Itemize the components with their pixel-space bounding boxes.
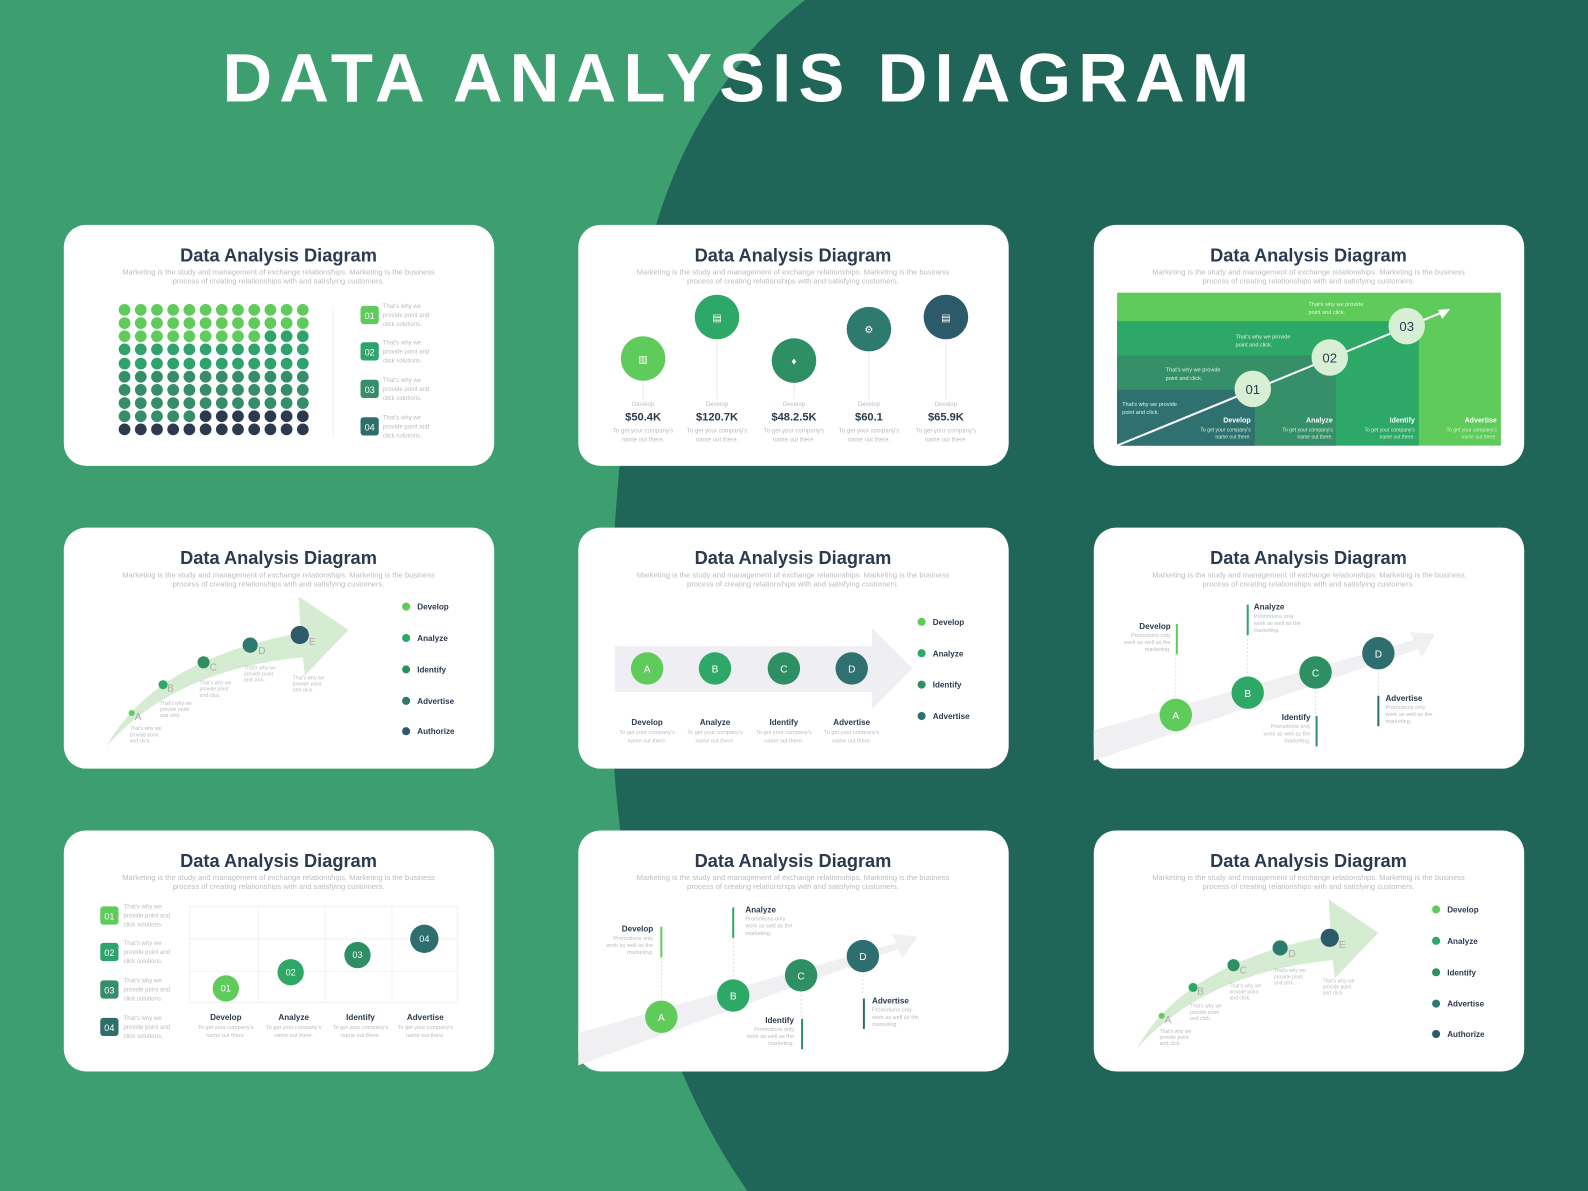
legend: Authorize — [417, 727, 455, 736]
panel: dot matrix: Data Analysis Diagram — [180, 245, 377, 265]
panel: dot matrix: process of creating relationships with and satisfying customers. — [173, 277, 384, 286]
scatter grid: Advertise — [407, 1013, 444, 1022]
legend list: 02 — [365, 347, 375, 357]
staircase chart: name out there. — [1215, 435, 1251, 441]
legend list: provide point and — [383, 313, 429, 319]
diagonal chart: Promotions only — [1271, 724, 1311, 730]
list: That's why we — [124, 978, 162, 984]
staircase chart: Advertise — [1465, 416, 1497, 424]
scatter grid: To get your company's — [266, 1025, 322, 1031]
diagonal chart: Promotions only — [613, 936, 653, 942]
list: click solutions. — [124, 959, 163, 965]
legend: Analyze — [417, 634, 448, 643]
staircase chart: point and click. — [1122, 410, 1159, 416]
scatter grid: To get your company's — [398, 1025, 453, 1031]
panel: diagonal milestones 2: Marketing is the study and management of exchange relationships. Marketing is the business — [637, 873, 949, 882]
list: 02 — [104, 948, 114, 958]
legend: Analyze — [933, 649, 964, 658]
legend list: 03 — [365, 385, 375, 395]
panel: diagonal milestones: Data Analysis Diagram — [1210, 548, 1407, 568]
curved arrow chart: provide point — [1323, 984, 1352, 990]
diagonal chart: Analyze — [745, 905, 776, 914]
panel: straight arrow: Data Analysis Diagram — [695, 548, 891, 568]
diagonal chart: C — [1312, 669, 1319, 680]
arrow with steps: name out there. — [832, 738, 872, 744]
staircase chart: name out there. — [1379, 435, 1415, 441]
legend: Develop — [1447, 905, 1479, 914]
panel: staircase — [1094, 225, 1524, 466]
staircase chart: To get your company's — [1447, 427, 1497, 433]
curved arrow chart: and click. — [1274, 980, 1295, 986]
panel: diagonal milestones: Marketing is the study and management of exchange relationships. Marketing is the business — [1152, 570, 1465, 579]
value circles: To get your company's — [764, 428, 824, 434]
staircase chart: 02 — [1322, 351, 1337, 366]
panel: circle values: process of creating relationships with and satisfying customers. — [687, 277, 899, 286]
panel: circle values — [578, 225, 1009, 466]
panel: curved arrow: Data Analysis Diagram — [180, 548, 377, 568]
panel: straight arrow: process of creating relationships with and satisfying customers. — [687, 579, 899, 588]
title: DATA ANALYSIS DIAGRAM — [222, 39, 1256, 116]
panel: dot matrix — [64, 225, 494, 466]
legend list: That's why we — [383, 378, 422, 384]
staircase chart — [1117, 293, 1501, 446]
panel: diagonal milestones 2 — [578, 830, 1009, 1071]
list: click solutions. — [124, 1034, 163, 1040]
diagonal chart — [578, 905, 919, 1065]
legend list: provide point and — [383, 349, 429, 355]
curved arrow chart: A — [1165, 1015, 1172, 1026]
legend list: provide point and — [383, 424, 429, 430]
diagonal chart: Identify — [1282, 713, 1311, 722]
curved arrow chart: E — [309, 637, 316, 648]
diagonal chart: marketing. — [1385, 719, 1412, 725]
curved arrow chart — [1136, 899, 1378, 1049]
diagonal chart: marketing. — [1285, 738, 1311, 744]
curved arrow chart: A — [135, 712, 142, 723]
list: 01 — [104, 912, 114, 922]
list: click solutions. — [124, 997, 163, 1003]
arrow with steps: D — [848, 664, 855, 675]
legend: Advertise — [1447, 1000, 1485, 1009]
diagonal chart: marketing. — [627, 950, 654, 956]
panel: staircase: Marketing is the study and management of exchange relationships. Marketing is the business — [1152, 267, 1465, 276]
scatter grid: name out there. — [206, 1033, 246, 1039]
value circles: Develop — [935, 402, 958, 408]
arrow with steps: name out there. — [764, 738, 804, 744]
scatter grid: Analyze — [278, 1013, 309, 1022]
arrow with steps: Analyze — [700, 718, 731, 727]
staircase chart: point and click. — [1236, 342, 1273, 348]
legend list — [361, 304, 429, 440]
curved arrow chart: provide point — [130, 732, 159, 738]
legend: Identify — [933, 681, 962, 690]
legend: Develop — [417, 603, 449, 612]
curved arrow chart: B — [167, 684, 174, 695]
staircase chart: name out there. — [1297, 435, 1333, 441]
curved arrow chart: C — [210, 662, 217, 673]
staircase chart: That's why we provide — [1122, 402, 1177, 408]
staircase chart: To get your company's — [1364, 427, 1415, 433]
staircase chart: That's why we provide — [1236, 334, 1290, 340]
value circles: Develop — [783, 402, 806, 408]
curved arrow chart: provide point — [293, 682, 322, 688]
value circles: To get your company's — [839, 428, 899, 434]
list: provide point and — [124, 987, 170, 993]
value circles: name out there. — [696, 438, 739, 444]
curved arrow chart: That's why we — [1274, 968, 1306, 974]
scatter grid: Develop — [210, 1013, 242, 1022]
curved arrow chart: provide point — [200, 687, 229, 693]
scatter grid: 01 — [221, 983, 231, 993]
diagonal chart: marketing. — [872, 1022, 898, 1028]
diagonal chart: Promotions only — [1254, 614, 1294, 620]
legend: Advertise — [933, 712, 970, 721]
diagonal chart: B — [1244, 689, 1251, 700]
value circles: Develop — [858, 402, 881, 408]
curved arrow chart: and click. — [244, 678, 265, 684]
list: That's why we — [124, 941, 162, 947]
curved arrow chart: and click. — [200, 693, 221, 699]
staircase chart: To get your company's — [1200, 427, 1251, 433]
legend list: 04 — [365, 422, 375, 432]
diagonal chart: Develop — [622, 925, 653, 934]
staircase chart: 03 — [1399, 319, 1414, 334]
arrow with steps: To get your company's — [687, 730, 743, 736]
panel: diagonal milestones: process of creating relationships with and satisfying customers. — [1203, 579, 1414, 588]
legend list: 01 — [365, 311, 375, 321]
diagonal chart: marketing. — [745, 931, 772, 937]
curved arrow chart: That's why we — [130, 726, 162, 732]
staircase chart: Identify — [1390, 416, 1415, 424]
scatter grid: name out there. — [406, 1033, 445, 1039]
value circles — [613, 295, 976, 444]
list: provide point and — [124, 914, 170, 920]
scatter grid: 02 — [286, 967, 296, 977]
staircase chart: 01 — [1245, 382, 1260, 397]
panel: circle values: Data Analysis Diagram — [695, 245, 891, 265]
list: That's why we — [124, 904, 162, 910]
panel: grid scatter: Data Analysis Diagram — [180, 851, 377, 871]
scatter grid: 04 — [419, 934, 429, 944]
legend list: That's why we — [383, 340, 422, 346]
staircase chart: point and click. — [1308, 310, 1346, 316]
value circles: ▥ — [638, 355, 648, 366]
diagonal chart: Advertise — [1385, 694, 1423, 703]
arrow with steps — [615, 628, 912, 744]
diagonal chart: B — [730, 992, 737, 1003]
curved arrow chart: E — [1339, 940, 1346, 951]
value circles: $65.9K — [928, 411, 964, 423]
value circles: ▤ — [712, 313, 722, 324]
value circles: To get your company's — [613, 428, 673, 434]
curved arrow chart: provide point — [1274, 974, 1304, 980]
value circles: ♦ — [791, 357, 797, 368]
staircase chart: That's why we provide — [1166, 368, 1221, 374]
panel: curved arrow — [64, 528, 494, 769]
curved arrow chart: and click. — [1160, 1041, 1181, 1047]
staircase chart: Analyze — [1306, 416, 1333, 424]
arrow with steps: name out there. — [696, 738, 735, 744]
legend list: click solutions. — [383, 322, 422, 328]
arrow with steps: To get your company's — [756, 730, 812, 736]
arrow with steps: Develop — [631, 718, 663, 727]
curved arrow chart: That's why we — [1323, 978, 1355, 984]
diagonal chart: Promotions only — [1131, 633, 1171, 639]
list: provide point and — [124, 1025, 170, 1031]
curved arrow chart: That's why we — [160, 701, 192, 707]
value circles: Develop — [632, 402, 655, 408]
diagonal chart: Develop — [1139, 622, 1171, 631]
diagonal chart: marketing. — [1145, 647, 1171, 653]
scatter grid — [189, 906, 458, 1039]
legend: Develop — [933, 618, 964, 627]
scatter grid: name out there. — [274, 1033, 314, 1039]
curved arrow chart: provide point — [160, 707, 190, 713]
curved arrow chart: C — [1240, 965, 1247, 976]
arrow with steps: A — [644, 664, 651, 675]
panel: diagonal milestones 2: process of creating relationships with and satisfying customers. — [687, 882, 899, 891]
value circles: ⚙ — [864, 325, 873, 336]
panel: grid scatter: process of creating relationships with and satisfying customers. — [173, 882, 384, 891]
scatter grid: 03 — [352, 950, 363, 960]
curved arrow chart: That's why we — [200, 681, 232, 687]
panel: curved arrow 2: Data Analysis Diagram — [1210, 851, 1407, 871]
curved arrow chart: and click. — [130, 738, 151, 744]
diagonal chart: work as well as the — [746, 1034, 794, 1040]
list: provide point and — [124, 950, 170, 956]
diagonal chart: Promotions only — [745, 917, 785, 923]
panel: grid scatter — [64, 830, 494, 1071]
legend — [918, 618, 970, 721]
legend list: click solutions. — [383, 396, 422, 402]
panel: curved arrow 2 — [1094, 830, 1524, 1071]
diagonal chart — [1094, 603, 1435, 761]
legend list: That's why we — [383, 415, 422, 421]
diagonal chart: work as well as the — [744, 924, 792, 930]
value circles: $60.1 — [855, 411, 883, 423]
arrow with steps: name out there. — [628, 738, 667, 744]
panel: circle values: Marketing is the study and management of exchange relationships. Marketing is the business — [637, 267, 949, 276]
diagonal chart: A — [1172, 711, 1179, 722]
curved arrow chart: B — [1197, 987, 1204, 998]
curved arrow chart: That's why we — [1190, 1004, 1222, 1010]
value circles: name out there. — [925, 438, 967, 444]
curved arrow chart — [106, 597, 348, 746]
panel: straight arrow — [578, 528, 1009, 769]
curved arrow chart: That's why we — [1160, 1029, 1192, 1035]
scatter grid: Identify — [346, 1013, 375, 1022]
curved arrow chart: and click. — [293, 688, 314, 694]
diagonal chart: Promotions only — [872, 1008, 912, 1014]
diagonal chart: work as well as the — [1123, 640, 1171, 646]
legend: Advertise — [417, 697, 455, 706]
list: click solutions. — [124, 923, 163, 929]
curved arrow chart: That's why we — [293, 676, 325, 682]
curved arrow chart: and click. — [1323, 991, 1344, 997]
panel: grid scatter: Marketing is the study and management of exchange relationships. Marketing is the business — [122, 873, 435, 882]
curved arrow chart: provide point — [1190, 1010, 1219, 1016]
staircase chart: That's why we provide — [1308, 302, 1363, 308]
diagonal chart: D — [1375, 649, 1382, 660]
panel: curved arrow: process of creating relationships with and satisfying customers. — [173, 579, 384, 588]
diagonal chart: Promotions only — [754, 1027, 794, 1033]
diagonal chart: A — [658, 1013, 665, 1024]
list: That's why we — [124, 1016, 162, 1022]
curved arrow chart: D — [258, 646, 266, 657]
panel: curved arrow 2: Marketing is the study and management of exchange relationships. Marketing is the business — [1152, 873, 1465, 882]
value circles: name out there. — [773, 438, 816, 444]
arrow with steps: C — [780, 664, 788, 675]
diagonal chart: Analyze — [1254, 603, 1285, 612]
panel: diagonal milestones — [1094, 528, 1524, 769]
list: 04 — [104, 1023, 114, 1033]
diagonal chart: Advertise — [872, 997, 909, 1006]
arrow with steps: Identify — [769, 718, 799, 727]
curved arrow chart: provide point — [1160, 1035, 1189, 1041]
curved arrow chart: provide point — [244, 672, 274, 678]
legend: Authorize — [1447, 1030, 1485, 1039]
legend: Identify — [1447, 968, 1477, 977]
legend — [1432, 905, 1485, 1039]
arrow with steps: Advertise — [833, 718, 871, 727]
value circles: $48.2.5K — [771, 411, 817, 423]
value circles: Develop — [706, 402, 729, 408]
arrow with steps: To get your company's — [619, 730, 675, 736]
legend list: provide point and — [383, 387, 429, 393]
value circles: ▤ — [941, 313, 951, 324]
staircase chart: To get your company's — [1282, 427, 1333, 433]
arrow with steps: B — [712, 664, 719, 675]
legend: Analyze — [1447, 937, 1478, 946]
scatter grid: To get your company's — [333, 1025, 388, 1031]
diagonal chart: marketing. — [1254, 628, 1280, 634]
diagonal chart: work as well as the — [871, 1015, 919, 1021]
curved arrow chart: and click. — [1190, 1016, 1211, 1022]
panel: straight arrow: Marketing is the study and management of exchange relationships. Marketing is the business — [637, 570, 949, 579]
value circles: $50.4K — [625, 411, 661, 423]
curved arrow chart: That's why we — [1229, 983, 1261, 989]
curved arrow chart: and click. — [1229, 996, 1251, 1002]
scatter grid: To get your company's — [198, 1025, 254, 1031]
staircase chart: name out there. — [1461, 435, 1497, 441]
panel: curved arrow: Marketing is the study and management of exchange relationships. Marketing is the business — [122, 570, 435, 579]
staircase chart: Develop — [1223, 416, 1251, 424]
diagonal chart: D — [859, 952, 867, 963]
curved arrow chart: That's why we — [244, 665, 276, 671]
diagonal chart: work as well as the — [1384, 712, 1432, 718]
legend list: That's why we — [383, 304, 422, 310]
diagonal chart: marketing. — [768, 1041, 794, 1047]
value circles: To get your company's — [916, 428, 976, 434]
panel: dot matrix: Marketing is the study and management of exchange relationships. Marketing is the business — [122, 267, 435, 276]
curved arrow chart: D — [1288, 949, 1296, 960]
diagonal chart: work as well as the — [605, 943, 653, 949]
legend list: click solutions. — [383, 359, 422, 365]
diagonal chart: work as well as the — [1263, 731, 1311, 737]
panel: diagonal milestones 2: Data Analysis Diagram — [695, 851, 891, 871]
diagonal chart: C — [797, 971, 805, 982]
dot grid — [119, 304, 309, 435]
curved arrow chart: provide point — [1229, 990, 1259, 996]
panel: staircase: process of creating relationships with and satisfying customers. — [1203, 277, 1414, 286]
scatter grid: name out there. — [341, 1033, 380, 1039]
value circles: name out there. — [622, 438, 665, 444]
legend: Identify — [417, 665, 447, 674]
legend list: click solutions. — [383, 434, 422, 440]
curved arrow chart: and click. — [160, 713, 181, 719]
value circles: name out there. — [848, 438, 890, 444]
legend — [402, 603, 455, 736]
panel: staircase: Data Analysis Diagram — [1210, 245, 1407, 265]
list — [100, 904, 170, 1040]
arrow with steps: To get your company's — [824, 730, 880, 736]
staircase chart: point and click. — [1166, 376, 1203, 382]
value circles: $120.7K — [696, 411, 738, 423]
diagonal chart: Identify — [765, 1016, 794, 1025]
list: 03 — [104, 986, 114, 996]
diagonal chart: Promotions only — [1385, 705, 1426, 711]
panel: curved arrow 2: process of creating relationships with and satisfying customers. — [1203, 882, 1414, 891]
value circles: To get your company's — [687, 428, 747, 434]
diagonal chart: work as well as the — [1253, 621, 1301, 627]
